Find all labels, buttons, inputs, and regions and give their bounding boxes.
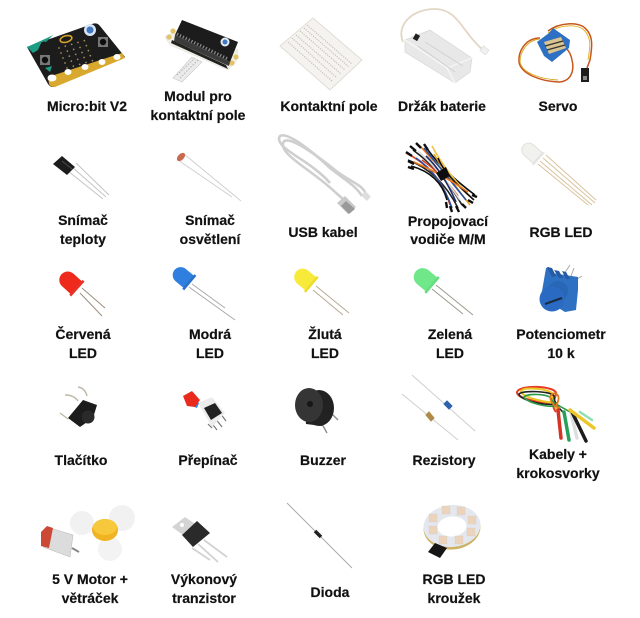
item: 5 V Motor + větráček: [41, 505, 135, 606]
icon: buzzer: [295, 388, 338, 433]
item: Rezistory: [402, 375, 476, 468]
label: Potenciometr: [516, 326, 606, 342]
label: [55, 325, 111, 361]
icon: light sensor: [175, 151, 241, 201]
item: Přepínač: [178, 391, 238, 468]
icon: USB cable: [279, 135, 371, 214]
item: Potenciometr 10 k: [516, 265, 606, 361]
label: Buzzer: [300, 452, 346, 468]
label: [516, 326, 606, 361]
label: větráček: [62, 590, 119, 606]
item: Modrá LED: [168, 263, 235, 361]
label: RGB LED: [422, 571, 486, 587]
label: [171, 571, 237, 606]
label: krokosvorky: [516, 465, 600, 481]
item: Držák baterie: [398, 9, 489, 114]
icon: temperature sensor: [53, 156, 109, 199]
item: Snímač osvětlení: [175, 151, 241, 247]
label: kontaktní pole: [151, 107, 246, 123]
item: Tlačítko: [55, 387, 107, 468]
label: Žlutá: [308, 325, 342, 342]
item: RGB LED: [518, 139, 596, 240]
label: USB kabel: [288, 224, 358, 240]
label: Modrá: [189, 326, 231, 342]
label: LED: [311, 345, 339, 361]
label: Přepínač: [178, 452, 238, 468]
label: LED: [69, 345, 97, 361]
label: Rezistory: [412, 452, 476, 468]
item: Servo: [519, 24, 592, 114]
icon: power transistor: [172, 517, 227, 562]
item: RGB LED kroužek: [422, 503, 486, 606]
item: Propojovací vodiče M/M: [406, 143, 489, 247]
label: vodiče M/M: [410, 231, 486, 247]
item: Micro:bit V2: [27, 23, 127, 114]
label: [428, 326, 472, 361]
icon: cables and alligator clips: [517, 387, 594, 441]
label: [422, 571, 486, 606]
item: Buzzer: [295, 388, 346, 468]
item: Modul pro kontaktní pole: [151, 20, 246, 123]
icon: battery holder: [401, 9, 489, 83]
item: Kabely + krokosvorky: [516, 387, 600, 481]
item: Kontaktní pole: [280, 18, 378, 114]
label: Držák baterie: [398, 98, 486, 114]
icon: motor and fan: [41, 505, 135, 561]
icon: green LED: [409, 263, 473, 315]
item: Zelená LED: [409, 263, 473, 361]
label: osvětlení: [180, 231, 241, 247]
icon: yellow LED: [290, 264, 349, 315]
label: Snímač: [185, 212, 235, 228]
icon: breadboard: [280, 18, 362, 90]
icon: potentiometer: [540, 265, 582, 312]
label: kroužek: [428, 590, 481, 606]
label: Propojovací: [408, 213, 489, 229]
label: Tlačítko: [55, 452, 107, 468]
icon: breakout module: [165, 20, 239, 82]
label: 10 k: [547, 345, 575, 361]
label: [516, 446, 600, 481]
label: teploty: [60, 231, 106, 247]
icon: resistors: [402, 375, 475, 440]
label: LED: [196, 345, 224, 361]
label: Výkonový: [171, 571, 237, 587]
item: Žlutá LED: [290, 264, 349, 361]
label: Micro:bit V2: [47, 98, 127, 114]
label: tranzistor: [172, 590, 236, 606]
label: [180, 212, 241, 247]
icon: diode: [287, 503, 352, 568]
label: [58, 212, 108, 247]
label: [151, 88, 246, 123]
item: Červená LED: [55, 267, 111, 361]
icon: switch: [183, 391, 226, 430]
icon: red LED: [55, 267, 105, 316]
item: Výkonový tranzistor: [171, 517, 237, 606]
item: USB kabel: [279, 135, 371, 240]
label: Modul pro: [164, 88, 232, 104]
label: Kontaktní pole: [280, 98, 378, 114]
label: 5 V Motor +: [52, 571, 128, 587]
label: Servo: [539, 98, 577, 114]
label: [308, 325, 342, 361]
icon: jumper wires: [406, 143, 477, 212]
label: Snímač: [58, 212, 108, 228]
label: [52, 571, 128, 606]
label: [189, 326, 231, 361]
label: RGB LED: [530, 224, 592, 240]
label: Červená: [55, 325, 111, 342]
icon: servo: [519, 24, 592, 82]
label: Dioda: [311, 584, 350, 600]
label: [408, 213, 489, 247]
label: LED: [436, 345, 464, 361]
label: Kabely +: [529, 446, 587, 462]
icon: push button: [60, 387, 97, 427]
icon: clear RGB LED: [518, 139, 596, 205]
icon: RGB LED ring: [422, 503, 482, 558]
item: Snímač teploty: [53, 156, 109, 247]
label: Zelená: [428, 326, 472, 342]
icon: micro:bit board: [27, 23, 125, 87]
icon: blue LED: [168, 263, 235, 320]
item: Dioda: [287, 503, 352, 600]
